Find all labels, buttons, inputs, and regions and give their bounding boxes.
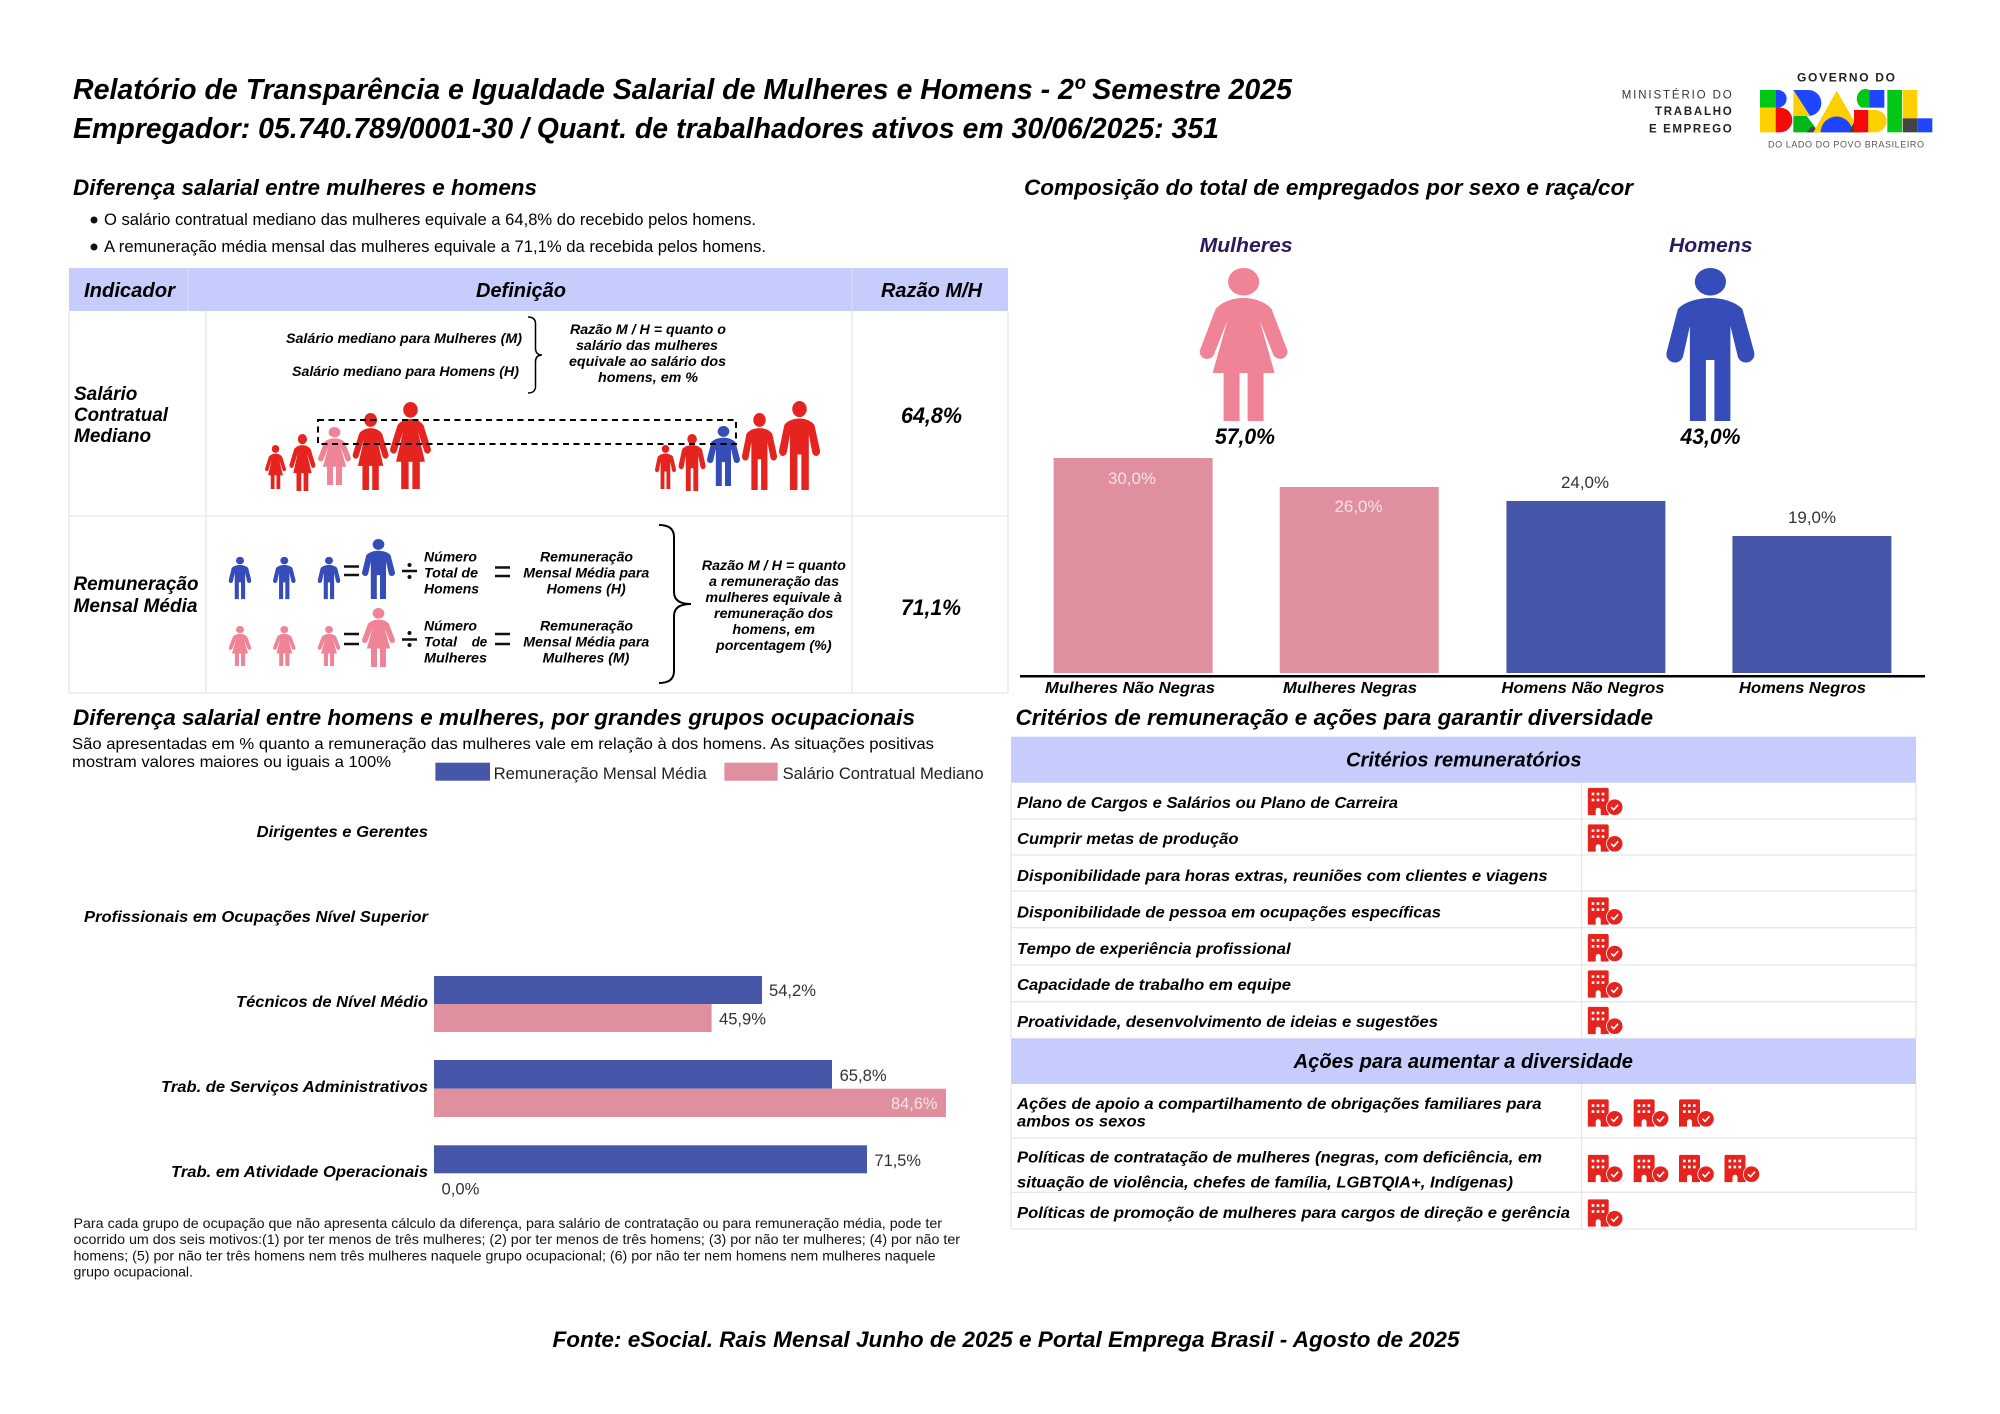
logo: Ministério do Trabalho e Emprego: E EMPREGO: [1649, 123, 1732, 135]
logo: Governo do Brasil: DO LADO DO POVO BRASILEIRO: [1768, 139, 1924, 149]
pictogram: homens: [1666, 235, 1754, 449]
bar chart: ocupações: 45,9%: [719, 1009, 766, 1028]
pictogram: mulheres: Mulheres: [1200, 235, 1293, 257]
logo: Ministério do Trabalho e Emprego: MINISTÉRIO DO: [1622, 88, 1732, 101]
formula: women: Total: [424, 634, 458, 650]
table: ações para aumentar a diversidade: Políticas de promoção de mulheres para cargos de direção e gerência: [1017, 1205, 1570, 1222]
heading: diferença salarial: Diferença salarial entre mulheres e homens: [73, 175, 537, 200]
category labels: Profissionais em Ocupações Nível Superior: [84, 909, 429, 926]
definition text: salário mediano: homens, em %: [598, 369, 699, 385]
bullet list: A remuneração média mensal das mulheres equivale a 71,1% da recebida pelos homens.: [104, 238, 766, 256]
row: remuneração mensal média label: Mensal Média: [74, 596, 198, 617]
footnote: grupo ocupacional.: [74, 1264, 193, 1280]
brace and definition: razão remuneração: mulheres equivale à: [705, 589, 842, 605]
table: critérios remuneratórios: Disponibilidade para horas extras, reuniões com clientes e viagens: [1017, 868, 1548, 885]
legend: Remuneração Mensal Média: [494, 765, 707, 783]
value: 71,1%: 71,1%: [901, 595, 961, 620]
pictogram: homens: 43,0%: [1680, 424, 1740, 449]
formula: women: Mulheres (M): [543, 650, 630, 666]
formula: women: [229, 608, 650, 667]
formula: women: de: [472, 634, 487, 650]
value: 64,8%: 64,8%: [901, 403, 962, 428]
heading: critérios: Critérios de remuneração e ações para garantir diversidade: [1016, 705, 1653, 730]
brace and definition: razão remuneração: porcentagem (%): [715, 637, 832, 653]
bar chart: sexo e raça/cor: Mulheres Não Negras: [1045, 680, 1215, 697]
pictogram: homens: Homens: [1669, 235, 1752, 257]
table header: Razão M/H: [881, 280, 983, 302]
bullet list: O salário contratual mediano das mulheres equivale a 64,8% do recebido pelos homens.: [104, 211, 756, 229]
description: [72, 736, 934, 771]
panel: grandes grupos ocupacionais: [72, 705, 984, 1280]
logo: Governo do Brasil: [1760, 71, 1932, 149]
bullet list: [90, 211, 766, 256]
formula: women: Mensal Média para: [523, 634, 650, 650]
bar chart: sexo e raça/cor: Homens Negros: [1739, 680, 1866, 697]
icon row: men by salary: [655, 401, 820, 491]
bar chart: ocupações: 84,6%: [891, 1094, 938, 1113]
bar chart: ocupações: [434, 976, 946, 1198]
table: ações para aumentar a diversidade: Políticas de contratação de mulheres (negras, com deficiência, em: [1017, 1150, 1542, 1167]
legend: Salário Contratual Mediano: [783, 765, 984, 783]
table: ações para aumentar a diversidade: ambos os sexos: [1017, 1114, 1146, 1131]
footnote: Para cada grupo de ocupação que não apresenta cálculo da diferença, para salário de contratação ou para remuneração média, pode ter: [74, 1215, 942, 1231]
logo: Ministério do Trabalho e Emprego: [1622, 88, 1732, 135]
footnote: homens; (5) por não ter três homens nem três mulheres naquele grupo ocupacional; (6) por não ter nem homens nem mulheres naquele: [74, 1248, 936, 1264]
bar chart: sexo e raça/cor: 19,0%: [1788, 508, 1836, 527]
panel: diferença salarial: [69, 175, 1008, 693]
table header: Indicador: [84, 280, 176, 302]
row: salário contratual mediano label: Salário: [74, 384, 137, 405]
brace and definition: razão remuneração: [659, 525, 846, 683]
title: Empregador: 05.740.789/0001-30 / Quant. de trabalhadores ativos em 30/06/2025: 351: [73, 113, 1219, 145]
row: salário contratual mediano label: [74, 384, 169, 447]
row: remuneração mensal média label: Remuneração: [74, 574, 198, 595]
formula: men: [229, 539, 650, 599]
table: critérios remuneratórios: Disponibilidade de pessoa em ocupações específicas: [1017, 904, 1441, 922]
description: São apresentadas em % quanto a remuneração das mulheres vale em relação à dos homens. As situações positivas: [72, 736, 934, 753]
heading: grupos ocupacionais: Diferença salarial entre homens e mulheres, por grandes grupos ocupacionais: [73, 705, 915, 730]
category labels: Dirigentes e Gerentes: [257, 824, 428, 841]
table: ações para aumentar a diversidade: situação de violência, chefes de família, LGBTQIA+, Indígenas): [1017, 1175, 1513, 1192]
formula: men: Homens: [424, 580, 479, 596]
formula: men: Mensal Média para: [523, 565, 650, 581]
formula: men: Remuneração: [540, 549, 633, 565]
category labels: Trab. de Serviços Administrativos: [161, 1079, 428, 1096]
pictogram: mulheres: 57,0%: [1215, 424, 1275, 449]
definition text: salário mediano: salário das mulheres: [576, 337, 718, 353]
icons: critérios adotados: [1588, 788, 1623, 1035]
bar chart: sexo e raça/cor: Mulheres Negras: [1283, 680, 1417, 697]
bar chart: sexo e raça/cor: 24,0%: [1561, 473, 1609, 492]
bar chart: sexo e raça/cor: Homens Não Negros: [1502, 680, 1665, 697]
definition text: salário mediano: equivale ao salário dos: [569, 353, 726, 369]
table header: [84, 280, 983, 302]
title: [73, 74, 1293, 145]
table: ações para aumentar a diversidade: [1011, 1038, 1916, 1229]
definition text: salário mediano: Salário mediano para Mulheres (M): [286, 330, 522, 346]
logo: Ministério do Trabalho e Emprego: TRABALHO: [1655, 106, 1732, 118]
bar chart: sexo e raça/cor: [1020, 458, 1925, 697]
formula: women: Remuneração: [540, 618, 633, 634]
bar chart: sexo e raça/cor: 26,0%: [1334, 497, 1382, 516]
logo: Governo do Brasil: GOVERNO DO: [1797, 71, 1895, 85]
bar chart: sexo e raça/cor: 30,0%: [1108, 469, 1156, 488]
icons: ações adotadas: [1588, 1099, 1760, 1227]
table: critérios remuneratórios: [1011, 737, 1916, 1038]
definition text: salário mediano: Razão M / H = quanto o: [570, 321, 726, 337]
row: salário contratual mediano label: Mediano: [74, 426, 151, 447]
description: mostram valores maiores ou iguais a 100%: [72, 754, 391, 771]
formula: men: Número: [424, 549, 477, 565]
brace and definition: razão remuneração: a remuneração das: [709, 573, 839, 589]
table: ações para aumentar a diversidade: Ações de apoio a compartilhamento de obrigações familiares para: [1016, 1096, 1542, 1113]
pictogram: mulheres: [1200, 235, 1293, 449]
category labels: Trab. em Atividade Operacionais: [171, 1164, 428, 1181]
panel: critérios e ações: [1011, 705, 1916, 1229]
table: critérios remuneratórios: Plano de Cargos e Salários ou Plano de Carreira: [1017, 795, 1398, 812]
formula: women: Mulheres: [424, 650, 487, 666]
table: critérios remuneratórios: Critérios remuneratórios: [1346, 750, 1582, 772]
table: critérios remuneratórios: Proatividade, desenvolvimento de ideias e sugestões: [1017, 1014, 1438, 1031]
definition text: salário mediano: Salário mediano para Homens (H): [292, 363, 519, 379]
formula: women: Número: [424, 618, 477, 634]
row: remuneração mensal média label: [74, 574, 198, 617]
indicator table: [69, 268, 1008, 693]
bar chart: ocupações: 0,0%: [442, 1179, 480, 1198]
footnote: ocorrido um dos seis motivos:(1) por ter menos de três mulheres; (2) por ter menos de três homens; (3) por não ter mulheres; (4) por não ter: [74, 1231, 960, 1247]
heading: composição: Composição do total de empregados por sexo e raça/cor: [1024, 175, 1634, 200]
brace and definition: razão remuneração: remuneração dos: [714, 605, 834, 621]
icon row: women by salary: [265, 402, 431, 491]
legend: [435, 763, 984, 783]
footnote: [74, 1215, 960, 1280]
formula: men: Total de: [424, 565, 478, 581]
formula: men: Homens (H): [547, 580, 626, 596]
bar chart: ocupações: 65,8%: [840, 1066, 887, 1085]
title: Relatório de Transparência e Igualdade Salarial de Mulheres e Homens - 2º Semestre 2025: [73, 74, 1293, 106]
table header: Definição: [476, 280, 566, 302]
bar chart: ocupações: 71,5%: [874, 1151, 921, 1170]
category labels: Técnicos de Nível Médio: [236, 994, 428, 1011]
brace and definition: razão remuneração: homens, em: [732, 621, 815, 637]
bar chart: ocupações: 54,2%: [769, 981, 816, 1000]
table: critérios remuneratórios: Tempo de experiência profissional: [1017, 941, 1291, 958]
table: critérios remuneratórios: Cumprir metas de produção: [1017, 831, 1239, 848]
table: critérios remuneratórios: Capacidade de trabalho em equipe: [1017, 977, 1291, 994]
row: salário contratual mediano label: Contratual: [74, 405, 169, 426]
panel: composição dos empregados: [1020, 175, 1925, 697]
definition text: salário mediano: [286, 317, 726, 393]
brace and definition: razão remuneração: Razão M / H = quanto: [702, 557, 846, 573]
table: ações para aumentar a diversidade: Ações para aumentar a diversidade: [1293, 1051, 1633, 1073]
source line: Fonte: eSocial. Rais Mensal Junho de 2025 e Portal Emprega Brasil - Agosto de 2025: [552, 1327, 1460, 1352]
category labels: [84, 824, 429, 1181]
